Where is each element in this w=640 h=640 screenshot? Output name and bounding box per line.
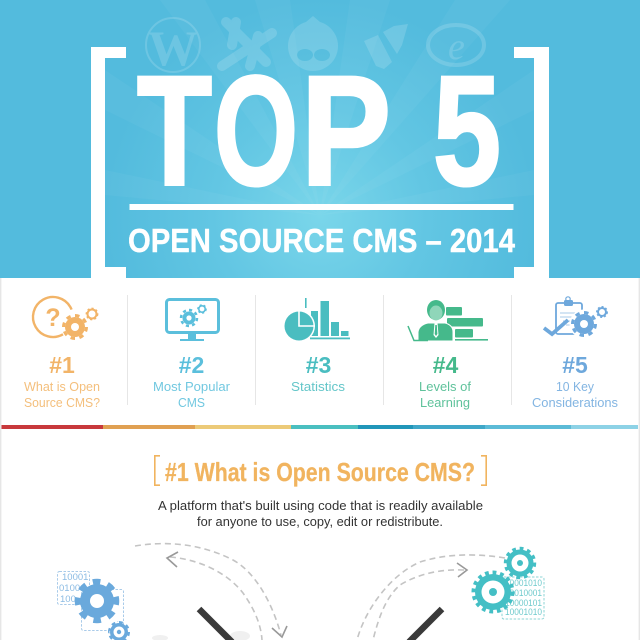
title: TOP 5: P: [301, 44, 391, 218]
binary box: 10010001: [505, 588, 542, 599]
binary box: 10001010: [505, 578, 542, 589]
title rule: [130, 204, 514, 210]
icon: monitor with gears: [166, 300, 218, 341]
gear: large blue: [78, 582, 116, 620]
right arrows: [357, 555, 505, 640]
intro paragraph: A platform that's built using code that is readily available: [158, 498, 483, 513]
header banner: [0, 0, 640, 278]
intro paragraph: for anyone to use, copy, edit or redistribute.: [197, 514, 443, 529]
heading brackets: [155, 456, 486, 485]
logo: WordPress: W: [148, 20, 198, 76]
nav item 5: [532, 297, 618, 410]
title: TOP 5: 5: [433, 44, 501, 218]
grey highlights: [152, 631, 250, 640]
left gears and code: [58, 572, 128, 640]
number 1: #1: [49, 352, 75, 378]
icon: person with bars: [408, 300, 488, 341]
crossing bars: [199, 609, 442, 640]
label 1: What is Open: [24, 380, 100, 394]
binary box: [502, 577, 544, 619]
gear: small teal: [506, 548, 534, 578]
label 5: 10 Key: [556, 380, 595, 394]
label 1: [24, 380, 100, 410]
label 2: CMS: [178, 396, 205, 410]
binary box: 10000101: [505, 598, 542, 609]
nav item 2: [153, 300, 230, 410]
intro paragraph: [158, 498, 483, 529]
number 2: #2: [179, 352, 204, 378]
number 3: #3: [306, 352, 331, 378]
nav item 1: [24, 290, 100, 410]
number 4: #4: [433, 352, 458, 378]
title: TOP 5: O: [214, 44, 298, 218]
icon: question and gears: ?: [45, 304, 61, 332]
title: TOP 5: [137, 44, 501, 218]
subtitle: OPEN SOURCE CMS – 2014: [128, 222, 516, 259]
heading text: #1 What is Open Source CMS?: [165, 457, 475, 487]
icon: pie and bars: [283, 298, 350, 342]
section heading: [155, 456, 486, 487]
header bracket frame: [91, 47, 549, 278]
label 4: [419, 380, 472, 410]
binary box: 0100: [59, 583, 80, 594]
left arrows: [135, 544, 287, 640]
right gears and code: [474, 548, 544, 619]
icon: clipboard check and gears: [544, 297, 607, 338]
label 2: Most Popular: [153, 380, 230, 394]
label 5: Considerations: [532, 396, 618, 410]
nav item 3: [283, 298, 350, 394]
label 5: [532, 380, 618, 410]
binary box: 100: [60, 594, 76, 605]
navigation section background: [0, 278, 640, 640]
logo: eQ: e: [448, 26, 465, 68]
logo: cone: [364, 24, 408, 69]
colour strip: [2, 425, 638, 429]
label 3: Statistics: [291, 380, 345, 394]
logo: Drupal: [288, 16, 338, 71]
number 5: #5: [562, 352, 588, 378]
gear: large teal: [474, 572, 512, 612]
binary box: [58, 572, 124, 630]
gear: small blue: [110, 622, 128, 640]
title: TOP 5: T: [137, 44, 212, 218]
label 4: Levels of: [419, 380, 472, 394]
logo: Joomla: [222, 22, 272, 66]
logo: eQ: [428, 25, 484, 68]
label 2: [153, 380, 230, 410]
label 4: Learning: [420, 396, 470, 410]
CMS logos row: [146, 16, 484, 76]
binary box: 10001: [62, 572, 88, 583]
nav item 4: [408, 300, 488, 410]
label 1: Source CMS?: [24, 396, 100, 410]
binary box: 10001010: [505, 607, 542, 618]
